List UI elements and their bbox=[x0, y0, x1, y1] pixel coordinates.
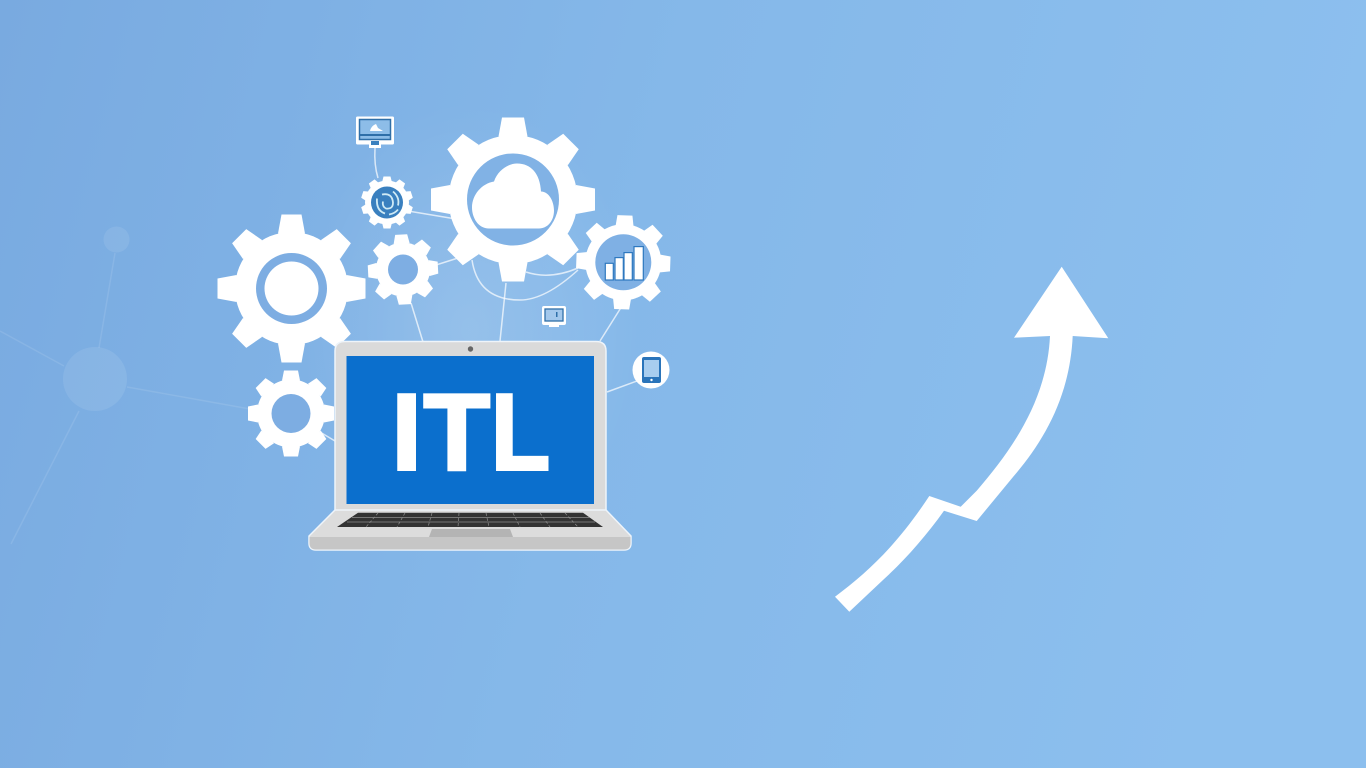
laptop screen bbox=[346, 356, 594, 504]
keyboard bbox=[337, 513, 603, 527]
icon: monitor bbox=[356, 116, 394, 148]
gear: bottom left bbox=[248, 370, 334, 456]
gear: bar chart bbox=[576, 215, 671, 310]
gear: large left bbox=[218, 214, 366, 362]
screen title: T bbox=[424, 372, 490, 494]
gear: medium bbox=[368, 234, 438, 305]
screen title: I bbox=[392, 372, 422, 494]
gear: swirl icon bbox=[361, 176, 413, 228]
growth arrow bbox=[835, 267, 1108, 612]
background network nodes bbox=[0, 226, 250, 544]
laptop base bbox=[309, 510, 631, 550]
trackpad bbox=[429, 529, 513, 537]
laptop bbox=[309, 342, 631, 550]
background glow bbox=[300, 100, 640, 560]
laptop camera bbox=[468, 346, 473, 352]
icon: bars bbox=[605, 247, 643, 280]
connector lines bbox=[320, 148, 637, 441]
screen title: L bbox=[491, 371, 550, 493]
gear: cloud bbox=[431, 118, 595, 282]
icon: small monitor bbox=[542, 306, 566, 327]
laptop lid bbox=[335, 342, 606, 512]
icon: cloud bbox=[472, 164, 554, 228]
screen title bbox=[392, 371, 550, 494]
icon: tablet bbox=[632, 352, 670, 388]
